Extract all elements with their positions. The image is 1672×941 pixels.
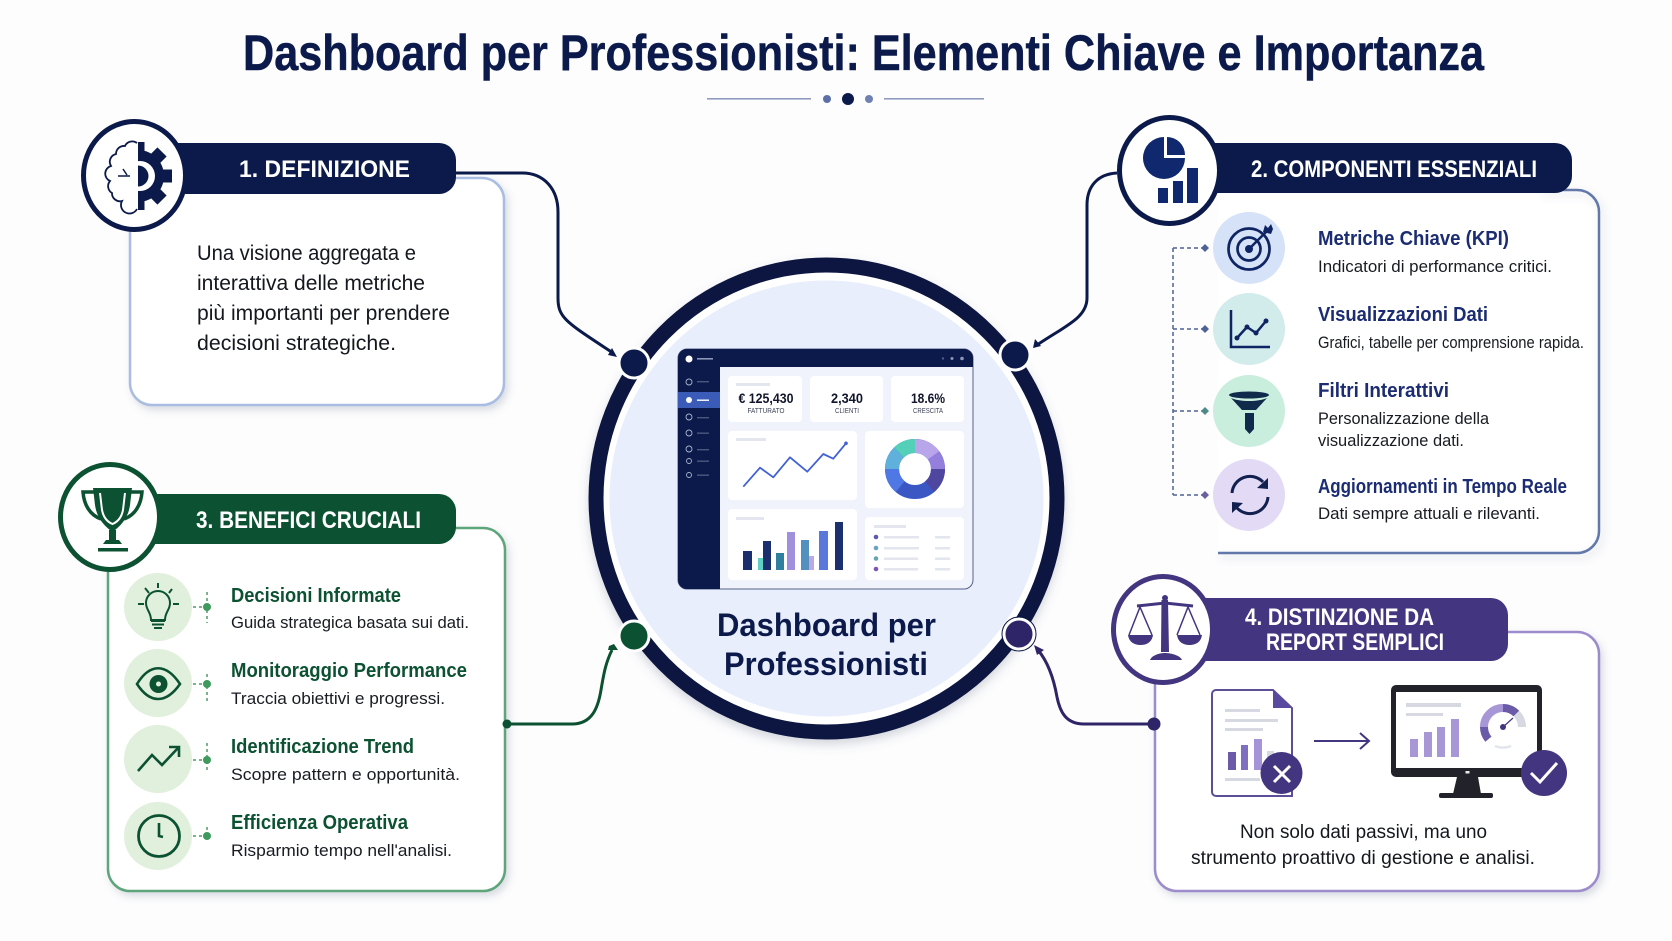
item: visualizzazioni dati (1213, 293, 1584, 365)
description: Una visione aggregata e (197, 242, 416, 265)
item: efficienza operativa (124, 802, 452, 870)
KPI card: fatturato: € 125,430 (738, 390, 794, 406)
dashed connector tree (1173, 244, 1209, 499)
KPI card: crescita (891, 376, 964, 422)
card (130, 178, 504, 405)
item: monitoraggio performance: Traccia obiettivi e progressi. (231, 689, 445, 708)
item: metriche chiave (1213, 212, 1552, 284)
item: decisioni informate: Guida strategica basata sui dati. (231, 613, 469, 632)
connector: componenti to hub (1000, 173, 1117, 370)
item: filtri interattivi: Filtri Interattivi (1318, 380, 1449, 402)
arrow (1314, 733, 1369, 749)
item: identificazione trend: Identificazione Trend (231, 736, 414, 758)
header pill (135, 143, 456, 194)
hub label (717, 607, 936, 682)
KPI card: clienti (810, 376, 883, 422)
KPI card: fatturato (728, 376, 802, 422)
line chart (728, 431, 857, 500)
KPI card: fatturato: FATTURATO (748, 408, 785, 415)
item: monitoraggio performance: Monitoraggio Performance (231, 660, 467, 682)
card (108, 528, 505, 891)
panel: 3. benefici cruciali (60, 464, 505, 891)
description (1191, 822, 1535, 869)
panel: 4. distinzione da report semplici (1114, 576, 1599, 891)
KPI card: crescita: CRESCITA (913, 408, 943, 415)
title divider (707, 93, 984, 105)
list card (865, 517, 964, 580)
item: filtri interattivi: visualizzazione dati. (1318, 431, 1464, 450)
header pill (1164, 598, 1508, 661)
item: efficienza operativa: Efficienza Operativa (231, 812, 409, 834)
item: aggiornamenti in tempo reale: Dati sempre attuali e rilevanti. (1318, 504, 1540, 523)
header label (1245, 604, 1444, 656)
item: visualizzazioni dati: Grafici, tabelle per comprensione rapida. (1318, 333, 1584, 352)
item: identificazione trend (124, 725, 460, 793)
central hub (596, 265, 1057, 732)
hub label: Professionisti (724, 646, 928, 682)
item: metriche chiave: Indicatori di performance critici. (1318, 257, 1552, 276)
header pill (1169, 143, 1572, 193)
icon: brain and gear (84, 122, 186, 230)
connector: distinzione to hub (1002, 617, 1160, 730)
icon: static report with cross (1212, 690, 1302, 796)
item: decisioni informate (124, 573, 469, 641)
connector: definizione to hub (456, 173, 649, 378)
item: filtri interattivi: Personalizzazione della (1318, 409, 1490, 428)
description (197, 242, 450, 355)
description: interattiva delle metriche (197, 272, 425, 295)
item: efficienza operativa: Risparmio tempo nell'analisi. (231, 841, 452, 860)
item: metriche chiave: Metriche Chiave (KPI) (1318, 228, 1509, 250)
icon: scales (1114, 576, 1212, 682)
description: strumento proattivo di gestione e analisi. (1191, 848, 1535, 869)
bar chart (728, 509, 857, 580)
KPI card: crescita: 18.6% (911, 390, 945, 406)
description: Non solo dati passivi, ma uno (1240, 822, 1487, 843)
item: filtri interattivi (1213, 375, 1490, 450)
connector: benefici to hub (502, 621, 649, 728)
item: aggiornamenti in tempo reale (1213, 459, 1567, 531)
description: decisioni strategiche. (197, 332, 396, 355)
header label: 4. DISTINZIONE DA (1245, 604, 1434, 631)
KPI card: clienti: 2,340 (831, 390, 863, 406)
card (1218, 190, 1599, 553)
card (1155, 632, 1599, 891)
item: aggiornamenti in tempo reale: Aggiornamenti in Tempo Reale (1318, 476, 1567, 498)
header label: 1. DEFINIZIONE (239, 156, 410, 183)
item: decisioni informate: Decisioni Informate (231, 585, 401, 607)
panel: 1. definizione (84, 122, 504, 405)
dashboard mockup (678, 349, 973, 589)
icon: pie and bars (1120, 118, 1220, 224)
title: Dashboard per Professionisti: Elementi Chiave e Importanza (243, 25, 1485, 81)
item: identificazione trend: Scopre pattern e opportunità. (231, 765, 460, 784)
header label: 2. COMPONENTI ESSENZIALI (1251, 156, 1537, 183)
donut chart (865, 431, 964, 508)
header pill (110, 494, 456, 544)
item: monitoraggio performance (124, 649, 467, 717)
item: visualizzazioni dati: Visualizzazioni Dati (1318, 304, 1488, 326)
KPI card: clienti: CLIENTI (835, 408, 859, 415)
card outline (1218, 190, 1599, 553)
header label: 3. BENEFICI CRUCIALI (196, 507, 421, 534)
header label: REPORT SEMPLICI (1266, 629, 1444, 656)
hub label: Dashboard per (717, 607, 936, 643)
icon: dashboard monitor with check (1391, 685, 1567, 798)
icon: trophy (60, 464, 160, 570)
description: più importanti per prendere (197, 302, 450, 325)
panel: 2. componenti essenziali (1120, 118, 1599, 553)
